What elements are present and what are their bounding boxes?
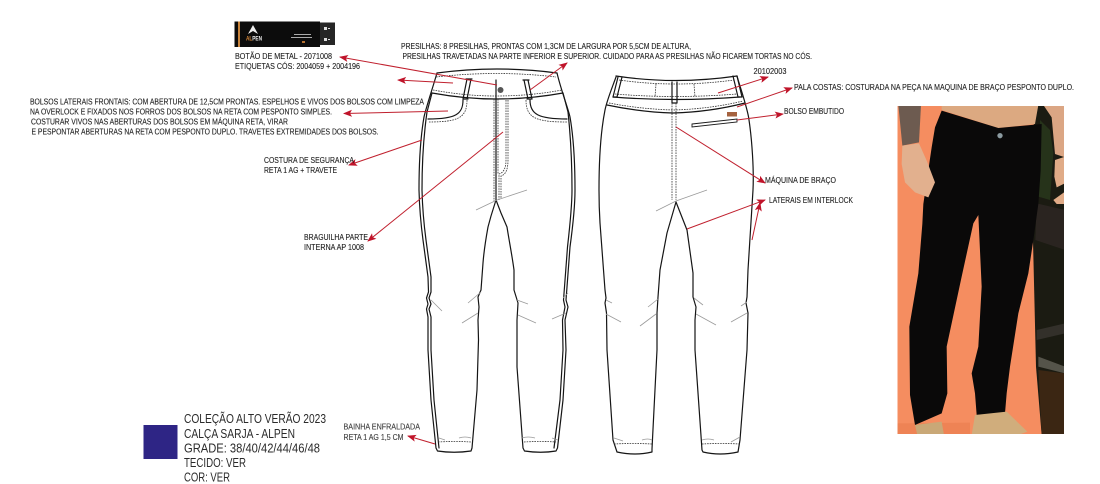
front fly [495, 80, 497, 201]
callout: front side pockets: COSTURAR VIVOS NAS ABERTURAS DOS BOLSOS EM MÁQUINA RETA, VIRAR [31, 116, 288, 126]
front outer silhouette [419, 73, 575, 452]
callout: hem: RETA 1 AG 1,5 CM [344, 432, 404, 442]
brand label image: Alpen [234, 22, 335, 47]
callout: front side pockets: E PESPONTAR ABERTURAS NA RETA COM PESPONTO DUPLO. TRAVETES EXTREMIDADES DOS BOLSOS. [32, 126, 378, 136]
back hem stitching [614, 442, 740, 445]
product info block [184, 411, 326, 484]
front outer side seam double line [422, 93, 572, 448]
callout: hem [344, 422, 420, 442]
front pockets [428, 100, 567, 119]
front belt loops [463, 79, 532, 99]
back belt loops [613, 76, 742, 103]
callout: button and waist labels [235, 51, 360, 71]
callout: arm machine: MÁQUINA DE BRAÇO [765, 175, 836, 185]
callout: front side pockets: BOLSOS LATERAIS FRONTAIS: COM ABERTURA DE 12,5CM PRONTAS. ESPELHOS E VIVOS DOS BOLSOS COM LIMPEZA [30, 96, 424, 106]
product photo of model wearing black trousers [897, 105, 1065, 435]
callout: button and waist labels: ETIQUETAS CÓS: 2004059 + 2004196 [235, 61, 360, 71]
product info block: CALÇA SARJA - ALPEN [184, 426, 295, 441]
product info block: GRADE: 38/40/42/44/46/48 [184, 440, 320, 456]
callout: belt loops: PRESILHAS TRAVETADAS NA PARTE INFERIOR E SUPERIOR. CUIDADO PARA AS PRESILHAS NÃO FICAREM TORTAS NO CÓS. [402, 51, 812, 61]
callout: safety stitch: RETA 1 AG + TRAVETE [264, 165, 337, 175]
callout: front side pockets: NA OVERLOCK E FIXADOS NOS FORROS DOS BOLSOS NA RETA COM PESPONTO SIMPLES. [30, 106, 332, 116]
back welt pocket [692, 119, 737, 127]
callout: hem: BAINHA ENFRALDADA [344, 422, 420, 432]
callout: button and waist labels: BOTÃO DE METAL - 2071008 [235, 51, 332, 61]
back pants flat sketch [599, 76, 753, 454]
product info block: TECIDO: VER [184, 455, 246, 470]
back waistband [607, 76, 745, 113]
callout: fly: BRAGUILHA PARTE [304, 232, 368, 242]
callout: front side pockets [30, 96, 424, 136]
red leader arrows [340, 57, 792, 444]
back outer silhouette [599, 76, 753, 454]
callout: interlock sides: LATERAIS EM INTERLOCK [769, 195, 853, 205]
callout: fly [304, 232, 368, 252]
callout: belt loops [401, 41, 812, 61]
product info block: COLEÇÃO ALTO VERÃO 2023 [184, 411, 326, 426]
callout: safety stitch [264, 155, 354, 175]
colour swatch [144, 425, 178, 459]
callout: fly: INTERNA AP 1008 [304, 242, 364, 252]
front button [498, 87, 504, 93]
brand label image: Alpen: ALPEN [246, 36, 262, 42]
callout: welt pocket: BOLSO EMBUTIDO [784, 106, 844, 116]
callout: belt loops: PRESILHAS: 8 PRESILHAS, PRONTAS COM 1,3CM DE LARGURA POR 5,5CM DE ALTURA, [401, 41, 691, 51]
back yoke center seam [655, 84, 695, 200]
front waistband [432, 69, 563, 99]
back brand label [727, 112, 737, 116]
front hem stitching [438, 440, 556, 443]
callout: safety stitch: COSTURA DE SEGURANÇA [264, 155, 354, 165]
callout: code 20102003: 20102003 [754, 66, 787, 76]
front pants flat sketch [419, 69, 575, 452]
